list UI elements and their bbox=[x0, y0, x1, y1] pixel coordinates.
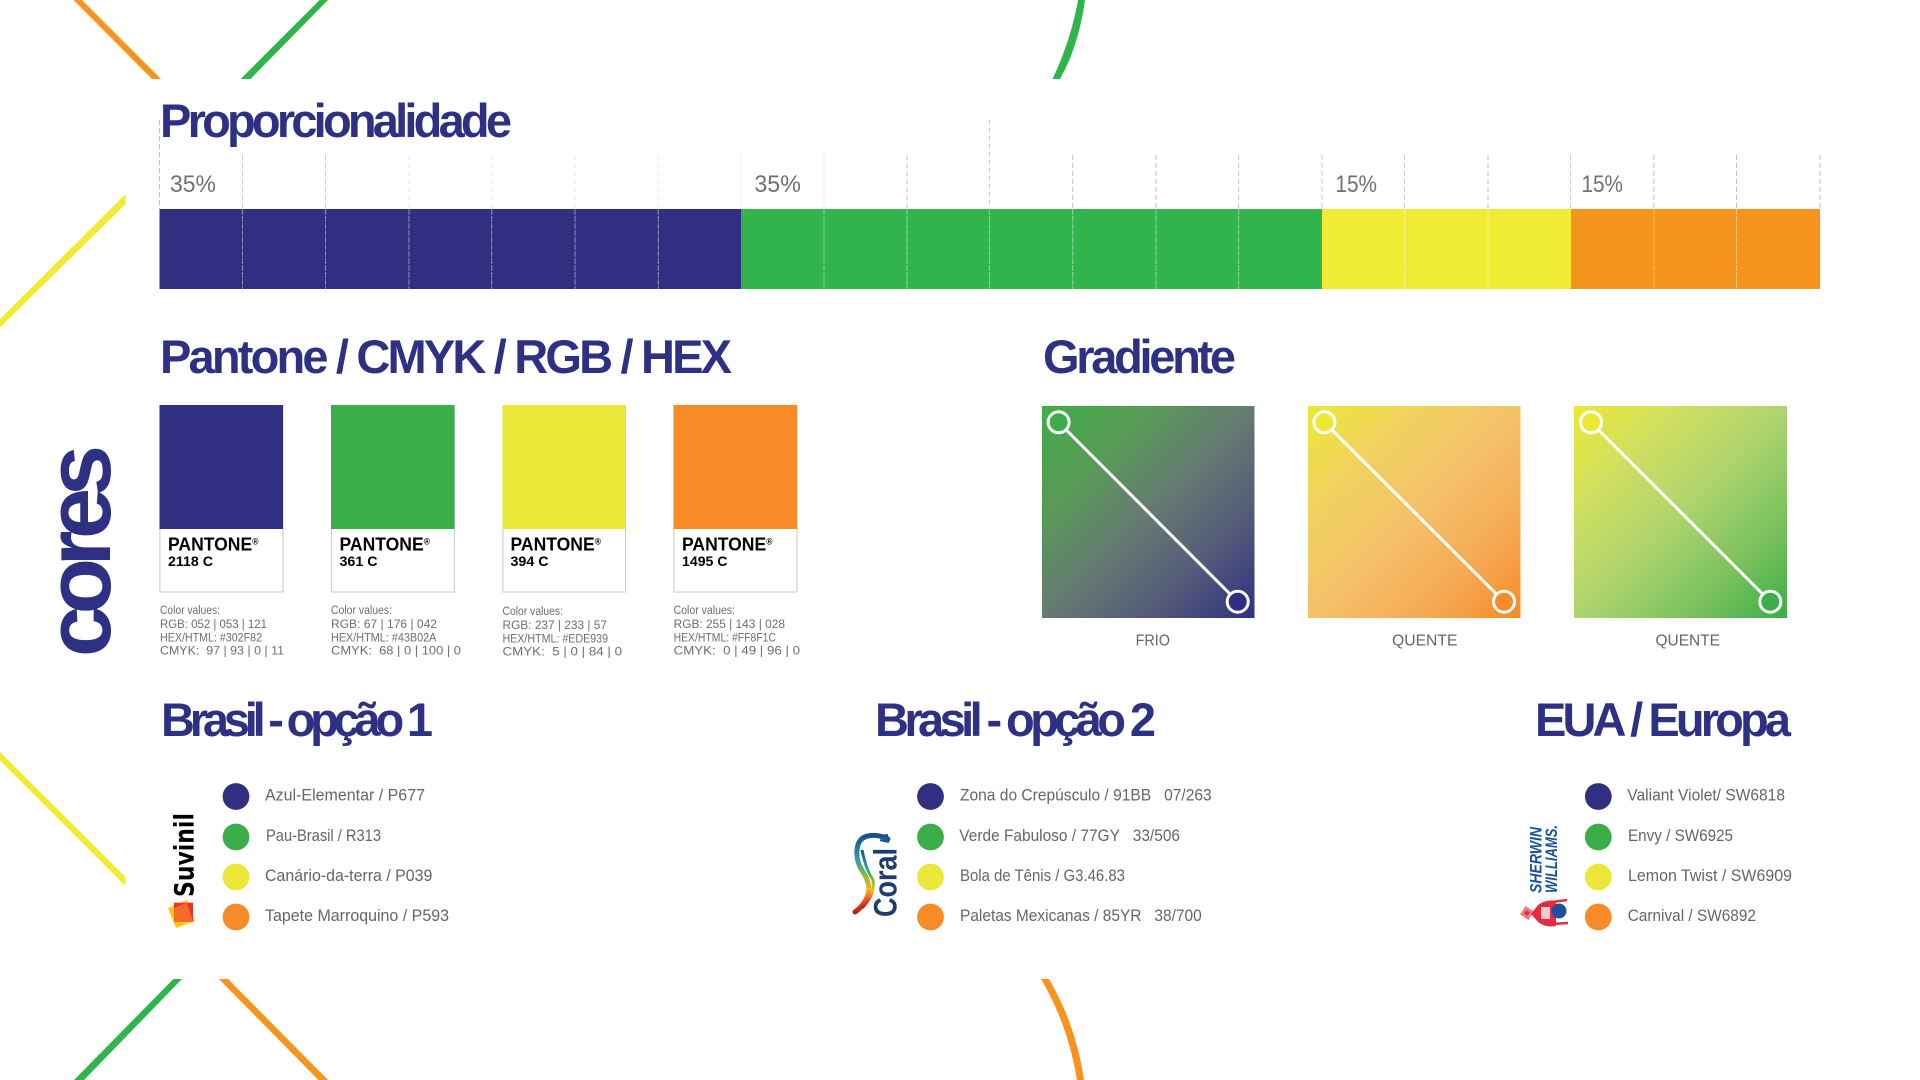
panel: gradient quente laranja bbox=[1308, 406, 1520, 650]
panel: swatch 1495 C: CMYK: 0 | 49 | 96 | 0 bbox=[674, 646, 800, 658]
legend: Brasil opção 2 bbox=[917, 783, 1212, 930]
panel: swatch 394 C bbox=[502, 405, 626, 658]
panel: swatch 361 C: CMYK: 68 | 0 | 100 | 0 bbox=[331, 646, 461, 658]
panel: swatch 1495 C: Color values: bbox=[674, 605, 735, 617]
heading: Brasil - opção 2: Brasil - opção 2 bbox=[875, 693, 1156, 746]
panel: swatch 361 C: ® bbox=[424, 537, 430, 547]
logo: Suvinil bbox=[168, 813, 200, 928]
panel: swatch 361 C: RGB: 67 | 176 | 042 bbox=[331, 619, 437, 631]
logo: Suvinil: Suvinil bbox=[170, 813, 200, 897]
proportion bar chart bbox=[160, 120, 1820, 289]
panel: swatch 1495 C: PANTONE bbox=[682, 534, 771, 555]
panel: swatch 394 C: Color values: bbox=[502, 606, 563, 618]
panel: swatch 1495 C: ® bbox=[766, 537, 773, 547]
panel: swatch 2118 C: Color values: bbox=[160, 605, 220, 617]
legend: EUA / Europa bbox=[1585, 783, 1792, 930]
panel: swatch 1495 C: RGB: 255 | 143 | 028 bbox=[674, 619, 785, 631]
panel: swatch 1495 C: 1495 C bbox=[682, 553, 728, 569]
panel: swatch 1495 C: HEX/HTML: #FF8F1C bbox=[674, 632, 776, 644]
panel: swatch 394 C: PANTONE bbox=[510, 534, 599, 555]
decorative corner lines bbox=[0, 0, 1085, 1080]
legend: EUA / Europa: Carnival / SW6892 bbox=[1628, 906, 1756, 925]
logo: Sherwin-Williams: WILLIAMS. bbox=[1542, 825, 1561, 893]
legend: Brasil opção 1: Azul-Elementar / P677 bbox=[265, 786, 425, 804]
panel: swatch 2118 C bbox=[160, 405, 284, 658]
logo: Sherwin-Williams: SHERWIN bbox=[1526, 826, 1546, 893]
segment: green 35% bbox=[741, 209, 1322, 289]
panel: swatch 1495 C bbox=[674, 405, 800, 658]
legend: EUA / Europa: Lemon Twist / SW6909 bbox=[1628, 866, 1792, 885]
panel: gradient quente verde: QUENTE bbox=[1656, 632, 1720, 650]
panel: swatch 394 C: 394 C bbox=[510, 553, 548, 569]
panel: swatch 361 C: PANTONE bbox=[340, 534, 428, 555]
panel: swatch 394 C: HEX/HTML: #EDE939 bbox=[502, 634, 608, 646]
panel: swatch 394 C: ® bbox=[595, 537, 601, 547]
panel: swatch 2118 C: RGB: 052 | 053 | 121 bbox=[160, 619, 267, 631]
panel: swatch 394 C: RGB: 237 | 233 | 57 bbox=[502, 620, 607, 632]
legend: Brasil opção 2: Bola de Tênis / G3.46.83 bbox=[960, 866, 1125, 885]
panel: swatch 361 C: HEX/HTML: #43B02A bbox=[331, 632, 437, 644]
legend: Brasil opção 2: Paletas Mexicanas / 85YR 38/700 bbox=[960, 906, 1202, 925]
legend: EUA / Europa: Envy / SW6925 bbox=[1628, 826, 1733, 845]
panel: gradient quente laranja: QUENTE bbox=[1392, 632, 1458, 650]
segment: blue 35% bbox=[160, 209, 741, 289]
heading: Pantone / CMYK / RGB / HEX: Pantone / CMYK / RGB / HEX bbox=[160, 330, 732, 383]
percent label blue: 35% bbox=[170, 171, 216, 198]
panel: swatch 2118 C: HEX/HTML: #302F82 bbox=[160, 632, 262, 644]
heading: EUA / Europa: EUA / Europa bbox=[1535, 693, 1792, 746]
panel: swatch 2118 C: ® bbox=[252, 537, 259, 547]
panel: swatch 361 C bbox=[331, 405, 461, 658]
panel: swatch 394 C: CMYK: 5 | 0 | 84 | 0 bbox=[502, 646, 622, 658]
segment: orange 15% bbox=[1571, 209, 1820, 289]
panel: gradient frio: FRIO bbox=[1136, 632, 1170, 650]
logo: Sherwin-Williams bbox=[1522, 825, 1568, 926]
heading: Brasil - opção 1: Brasil - opção 1 bbox=[161, 693, 433, 746]
legend: EUA / Europa: Valiant Violet/ SW6818 bbox=[1627, 786, 1785, 804]
panel: swatch 2118 C: 2118 C bbox=[168, 553, 213, 569]
panel: gradient frio bbox=[1042, 406, 1254, 650]
section label: cores: cores bbox=[28, 445, 130, 657]
panel: swatch 2118 C: CMYK: 97 | 93 | 0 | 11 bbox=[160, 646, 284, 658]
percent label green: 35% bbox=[754, 171, 801, 198]
legend: Brasil opção 1: Canário-da-terra / P039 bbox=[265, 866, 432, 885]
legend: Brasil opção 2: Zona do Crepúsculo / 91BB 07/263 bbox=[960, 786, 1212, 804]
heading: Gradiente: Gradiente bbox=[1043, 330, 1236, 383]
panel: swatch 361 C: Color values: bbox=[331, 605, 392, 617]
legend: Brasil opção 1: Tapete Marroquino / P593 bbox=[265, 906, 449, 925]
logo: Coral: Coral bbox=[868, 848, 904, 917]
heading: Proporcionalidade: Proporcionalidade bbox=[160, 94, 512, 147]
legend: Brasil opção 1 bbox=[223, 783, 449, 930]
panel: gradient quente verde bbox=[1574, 406, 1787, 650]
panel: swatch 2118 C: PANTONE bbox=[168, 534, 257, 555]
legend: Brasil opção 2: Verde Fabuloso / 77GY 33/506 bbox=[959, 826, 1180, 845]
percent label orange: 15% bbox=[1582, 171, 1623, 198]
segment: yellow 15% bbox=[1322, 209, 1571, 289]
legend: Brasil opção 1: Pau-Brasil / R313 bbox=[266, 826, 381, 845]
percent label yellow: 15% bbox=[1335, 171, 1377, 198]
panel: swatch 361 C: 361 C bbox=[340, 553, 378, 569]
